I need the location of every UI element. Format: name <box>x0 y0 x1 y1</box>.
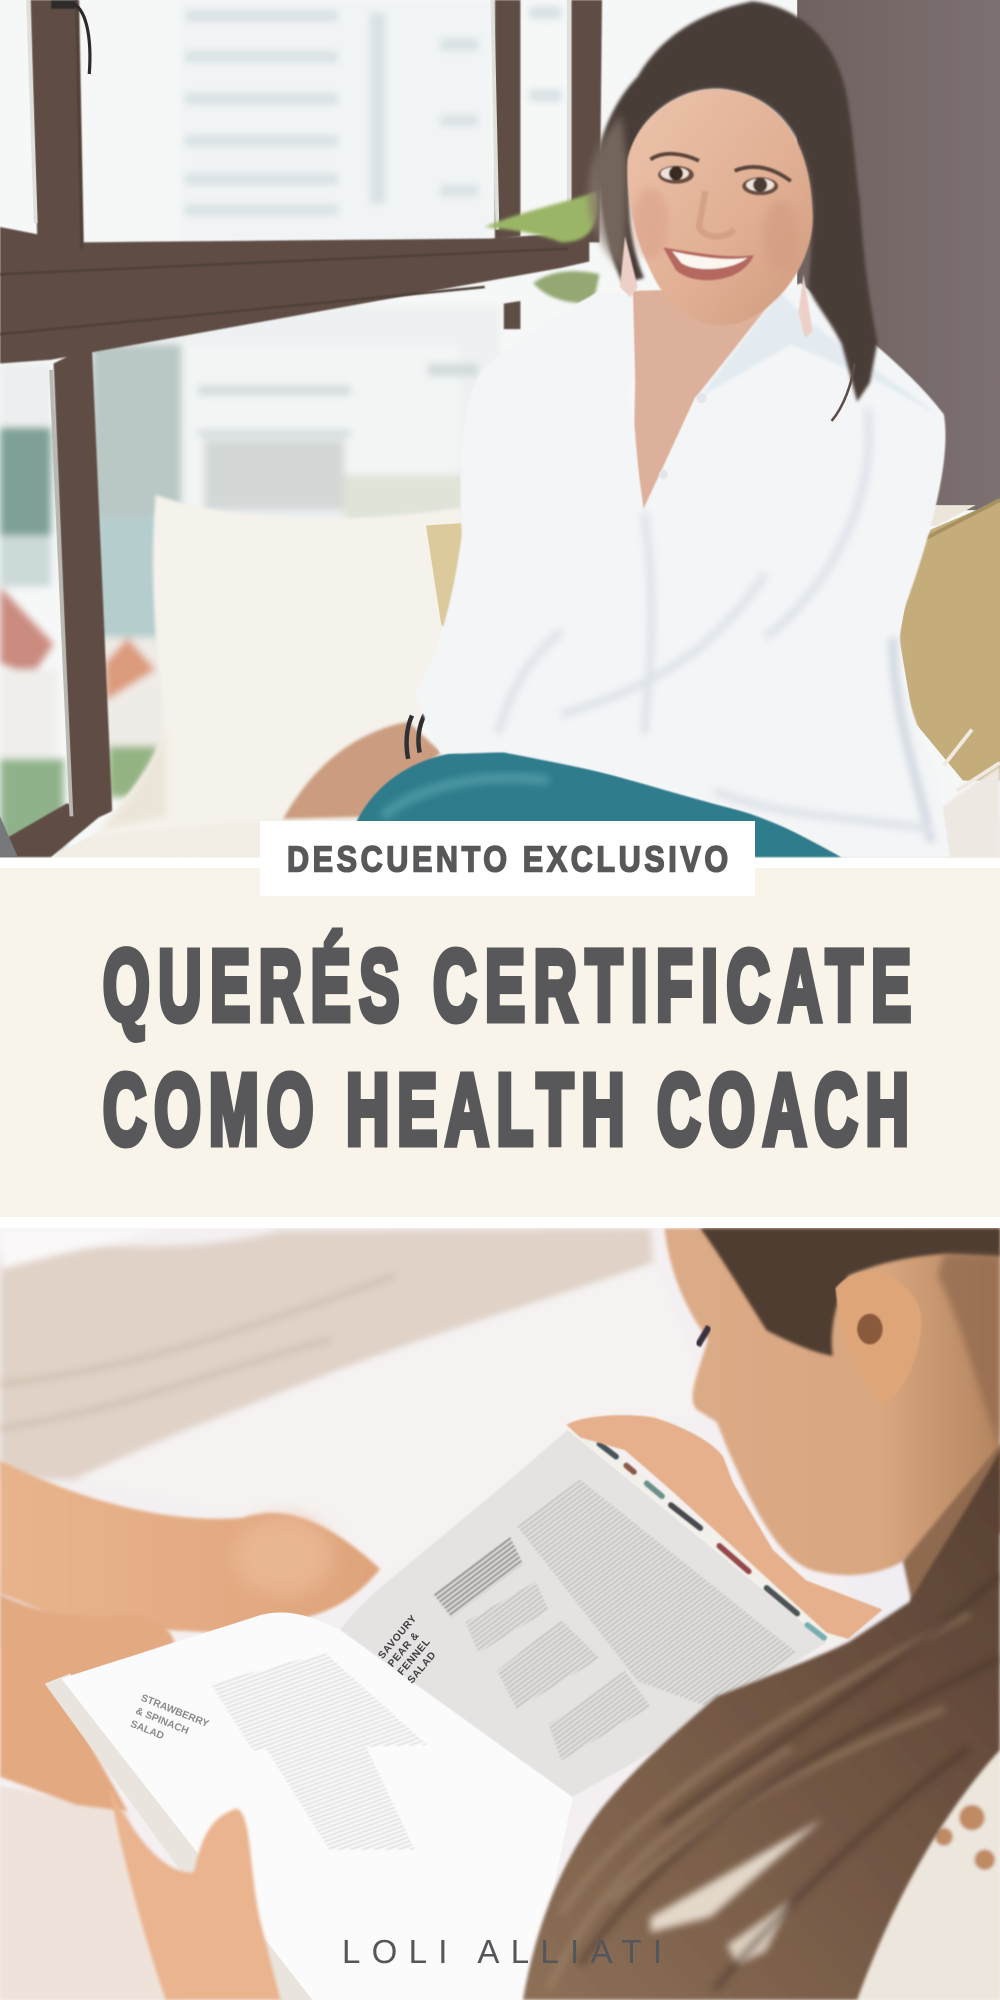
ear <box>835 1272 921 1403</box>
smile <box>663 247 754 280</box>
page heading: strawberry: STRAWBERRY <box>139 1693 210 1730</box>
blanket <box>0 1228 653 1480</box>
colour tabs on the book edge <box>599 1444 824 1638</box>
hand and forearm <box>283 722 441 819</box>
heading <box>103 930 911 1166</box>
white pillow <box>92 495 462 835</box>
left page <box>61 1612 573 2000</box>
page heading: strawberry: SALAD <box>129 1719 165 1742</box>
book edge strip <box>606 1461 829 1642</box>
page heading: savoury pear: SALAD <box>406 1650 439 1686</box>
hair strands and blouse showing through <box>548 1575 1000 1990</box>
legs <box>0 1460 380 1633</box>
dark hair on head <box>700 1228 1000 1356</box>
window view: buildings and garden <box>0 0 561 848</box>
text on left page <box>210 1653 427 1849</box>
cream panel <box>0 868 1000 1217</box>
signature: Loli Alliati: LOLI ALLIATI <box>342 1933 662 1970</box>
white bedspread <box>82 1264 652 1478</box>
feathers <box>942 728 1000 816</box>
tan cushion right <box>899 500 1000 781</box>
bracelets <box>407 714 425 759</box>
text on right page <box>434 1480 797 1760</box>
neck and face <box>665 1228 1000 1575</box>
book cover edge <box>45 1673 319 2000</box>
page heading: savoury pear: PEAR & <box>386 1630 422 1670</box>
label: descuento exclusivo <box>260 821 755 896</box>
small tan cushion <box>426 523 462 626</box>
white shirt <box>415 283 950 857</box>
eyelash <box>698 1327 709 1346</box>
label: descuento exclusivo: DESCUENTO EXCLUSIVO <box>287 840 728 880</box>
wall <box>797 0 1000 510</box>
face <box>627 89 813 325</box>
lower blouse <box>857 1751 1000 2000</box>
window frame <box>0 0 602 857</box>
neck and chest <box>632 289 770 510</box>
right page <box>341 1430 830 1797</box>
heading: COMO HEALTH COACH <box>103 1054 909 1166</box>
earrings <box>620 236 812 338</box>
long hair <box>523 1450 1000 2000</box>
plant <box>485 191 599 304</box>
eyes and brows <box>651 154 791 237</box>
heading: QUERÉS CERTIFICATE <box>103 930 911 1042</box>
shadow behind neck <box>903 1441 1000 1610</box>
sofa seat <box>51 814 1000 858</box>
photo: woman smiling on a sofa by the window <box>0 0 1000 858</box>
page heading: strawberry: & SPINACH <box>134 1706 190 1737</box>
page heading: savoury pear: SAVOURY <box>377 1613 419 1661</box>
hair <box>588 1 878 421</box>
near hand <box>108 1786 281 2000</box>
far hand <box>566 1415 883 1639</box>
photo: woman reading a book on the bed <box>0 1228 1000 2000</box>
jeans <box>351 750 842 857</box>
page heading: savoury pear: FENNEL <box>396 1637 433 1678</box>
laptop corner <box>0 816 18 857</box>
